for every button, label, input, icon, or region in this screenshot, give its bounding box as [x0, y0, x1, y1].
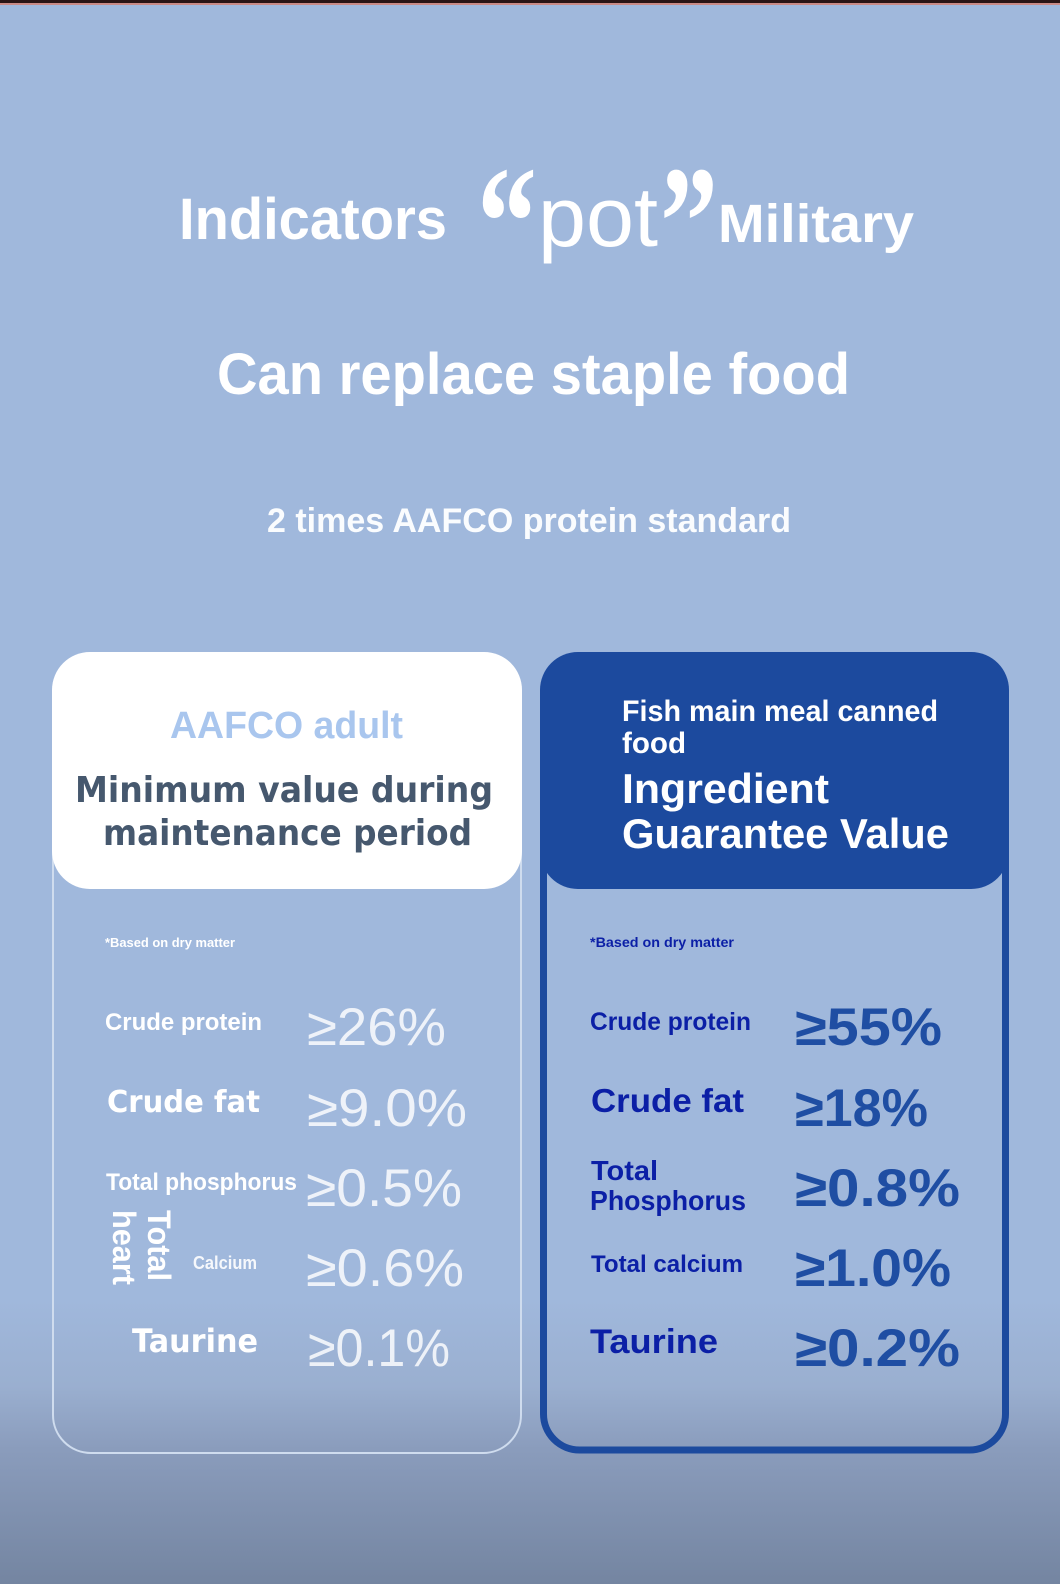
row: total phosphorus: Total	[591, 1155, 658, 1186]
row: total phosphorus	[590, 1155, 960, 1218]
title line 1	[179, 133, 914, 311]
row: total phosphorus: ≥0.5%	[306, 1159, 462, 1218]
row: total heart calcium	[106, 1210, 464, 1298]
header title: maintenance period	[103, 813, 472, 854]
row: crude protein: Crude protein	[105, 1009, 262, 1036]
row: crude fat	[107, 1079, 467, 1138]
row: total phosphorus: ≥0.8%	[795, 1159, 960, 1218]
row: total calcium: ≥1.0%	[795, 1239, 951, 1298]
panel: canned food guarantee	[540, 652, 1009, 1450]
row: total heart calcium: Calcium	[193, 1253, 257, 1273]
panel header	[52, 652, 522, 889]
row: taurine	[132, 1319, 450, 1378]
header title: Guarantee Value	[622, 810, 949, 857]
panel outline	[53, 700, 521, 1453]
note: *Based on dry matter	[590, 935, 735, 950]
row: crude fat: Crude fat	[591, 1082, 744, 1119]
row: total phosphorus	[106, 1159, 462, 1218]
header subtitle	[622, 695, 938, 760]
note: *Based on dry matter	[105, 936, 235, 950]
header title	[622, 765, 949, 857]
word: pot: pot	[538, 170, 658, 264]
header subtitle: Fish main meal canned	[622, 695, 938, 728]
opening quote: “	[477, 133, 537, 311]
row: total calcium: Total calcium	[591, 1251, 743, 1278]
row: total heart calcium: ≥0.6%	[306, 1239, 464, 1298]
row: crude fat	[591, 1079, 928, 1138]
panel outline	[544, 700, 1006, 1450]
row: total phosphorus: Total phosphorus	[106, 1169, 297, 1196]
row: crude protein: Crude protein	[590, 1008, 751, 1036]
row: total phosphorus: Phosphorus	[590, 1185, 746, 1216]
title line 1: Indicators	[179, 187, 447, 252]
row: crude protein	[105, 998, 446, 1057]
row: taurine: Taurine	[590, 1323, 718, 1361]
row: taurine: ≥0.2%	[795, 1319, 960, 1378]
row: crude fat: ≥18%	[795, 1079, 928, 1138]
row: total calcium	[591, 1239, 951, 1298]
header line: AAFCO adult: AAFCO adult	[170, 705, 403, 747]
row: crude protein	[590, 998, 942, 1057]
row: crude fat: ≥9.0%	[307, 1079, 467, 1138]
row: taurine	[590, 1319, 960, 1378]
rotated label: Total: Total	[141, 1210, 177, 1281]
row: crude protein: ≥26%	[307, 998, 446, 1057]
panel: AAFCO minimums	[52, 652, 522, 1453]
header title: Ingredient	[622, 765, 829, 812]
title line 2: Can replace staple food	[217, 342, 850, 407]
rotated label: heart: heart	[106, 1210, 142, 1285]
row: crude fat: Crude fat	[107, 1085, 260, 1120]
header title: Minimum value during	[75, 770, 493, 811]
closing quote: ”	[660, 133, 718, 311]
word: Military: Military	[718, 194, 914, 254]
row: taurine: Taurine	[132, 1322, 258, 1360]
header subtitle: food	[622, 727, 686, 760]
row: crude protein: ≥55%	[795, 998, 942, 1057]
row: taurine: ≥0.1%	[308, 1319, 450, 1378]
top edge strip	[0, 0, 1060, 5]
subtitle: 2 times AAFCO protein standard	[267, 502, 791, 540]
panel header	[540, 652, 1009, 889]
header title	[75, 770, 493, 854]
